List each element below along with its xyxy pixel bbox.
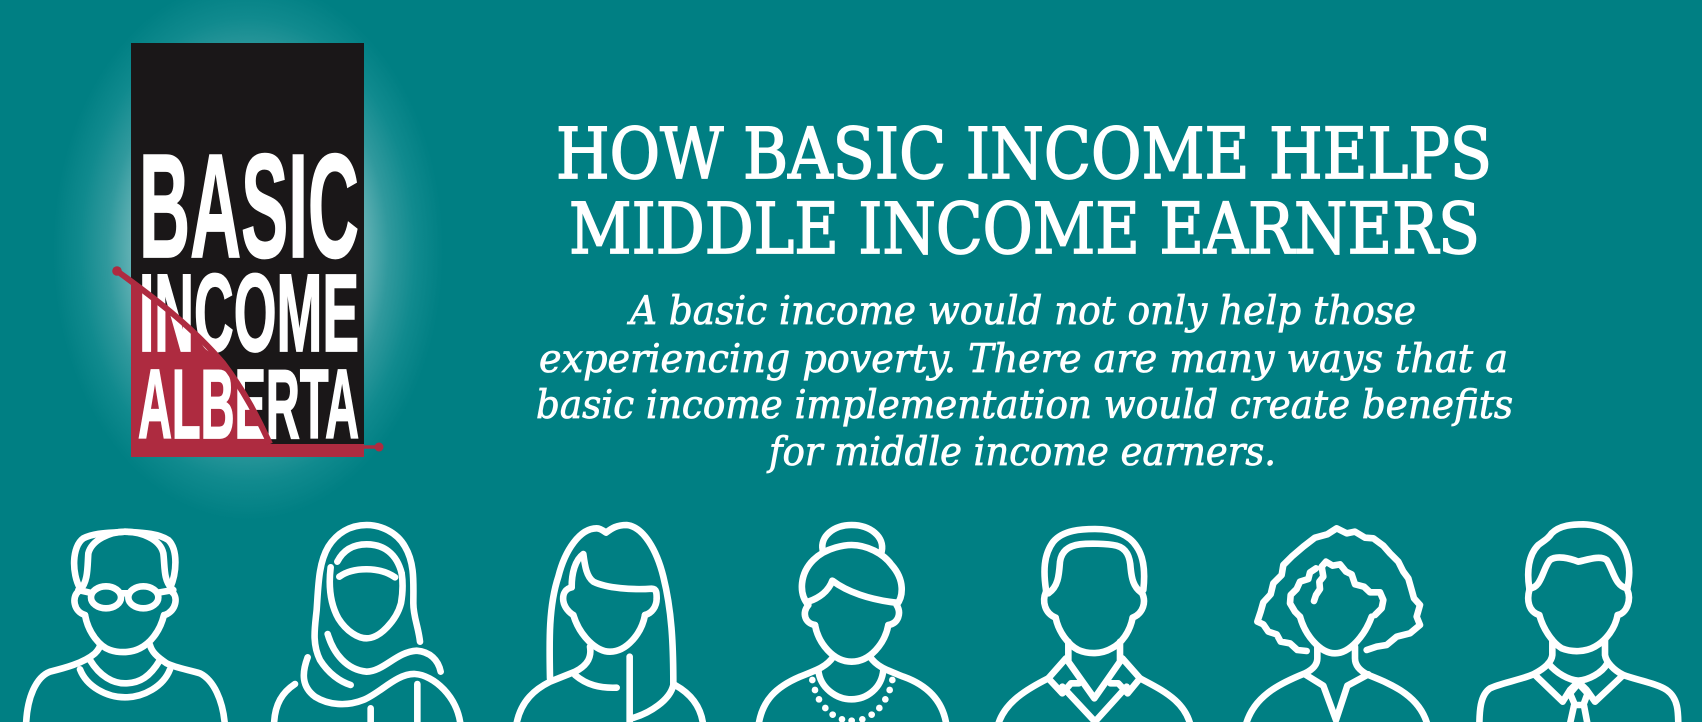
logo: Basic Income Alberta: ALBERTA — [138, 349, 359, 459]
intro paragraph: for middle income earners. — [766, 430, 1276, 475]
icon: woman with bun and pearls — [758, 525, 947, 722]
intro paragraph: A basic income would not only help those — [627, 289, 1416, 334]
title: HOW BASIC INCOME HELPS — [556, 113, 1492, 195]
intro paragraph: experiencing poverty. There are many ways that a — [539, 337, 1508, 382]
logo: Basic Income Alberta: BASIC — [139, 124, 359, 289]
icon: woman in hijab — [274, 525, 461, 722]
logo: Basic Income Alberta — [112, 43, 383, 459]
logo glow — [53, 0, 443, 520]
icon: man in shirt and tie — [1479, 524, 1678, 722]
title: MIDDLE INCOME EARNERS — [569, 188, 1480, 270]
intro paragraph: basic income implementation would create benefits — [536, 383, 1513, 428]
logo: Basic Income Alberta: INCOME — [139, 252, 359, 375]
title — [556, 113, 1492, 270]
icon: man with glasses — [26, 532, 225, 722]
icon: woman with curly hair — [1245, 528, 1428, 722]
icon: woman with long hair — [516, 525, 703, 722]
intro paragraph — [536, 289, 1513, 475]
icon: man in sweater and collar — [997, 529, 1192, 722]
